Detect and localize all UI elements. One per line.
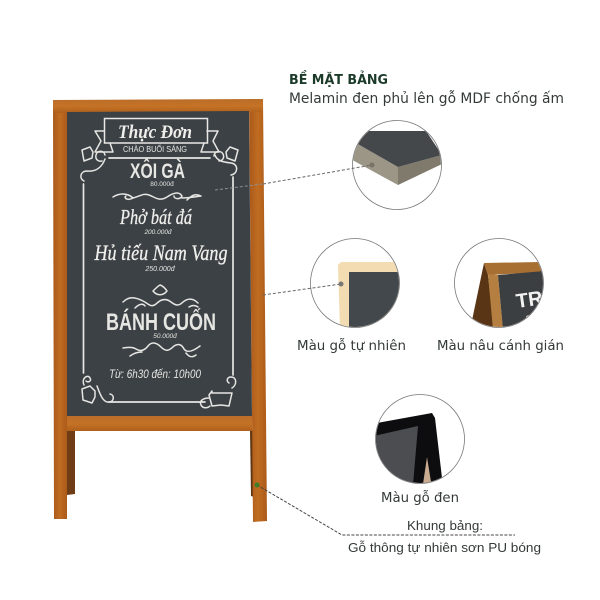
right edge of MDF xyxy=(398,155,442,185)
label: frame heading: Khung bảng: xyxy=(407,518,483,533)
board surface xyxy=(67,111,252,416)
menu item: Hủ tiếu Nam Vang: 250.000đ xyxy=(144,266,176,273)
heading: board surface: BỀ MẶT BẢNG xyxy=(289,69,388,88)
a-frame chalkboard xyxy=(53,99,267,522)
flourish 1 xyxy=(113,193,201,200)
flourish 2 xyxy=(123,285,198,308)
description: board surface: Melamin đen phủ lên gỗ MDF chống ấm xyxy=(289,90,564,107)
menu item: Phở bát đá: Phở bát đá xyxy=(119,205,192,229)
leader dot: wood colours xyxy=(338,282,344,286)
callout: cockroach brown circle xyxy=(454,238,545,330)
menu border ornaments xyxy=(81,147,238,408)
menu item: Xôi Gà xyxy=(130,159,185,188)
opening hours: Từ: 6h30 đến: 10h00 xyxy=(109,369,202,381)
leader line: surface xyxy=(215,165,372,190)
menu item: Hủ tiếu Nam Vang xyxy=(94,240,228,273)
leader dot: frame xyxy=(254,482,260,488)
menu banner xyxy=(95,118,219,154)
callout: black wood circle xyxy=(372,394,464,490)
label: black wood: Màu gỗ đen xyxy=(381,489,459,506)
leader dot: surface xyxy=(370,162,374,168)
callout: cockroach brown circle: TR xyxy=(515,287,545,313)
flourish 3 xyxy=(123,343,200,357)
callout: natural wood circle xyxy=(310,238,401,332)
left edge of MDF xyxy=(353,144,398,185)
title: Thực Đơn: Thực Đơn xyxy=(118,122,192,143)
menu item: Bánh Cuốn: 50.000đ xyxy=(153,333,178,340)
label: cockroach brown: Màu nâu cánh gián xyxy=(437,338,564,354)
melamin top xyxy=(356,131,442,167)
subtitle: CHÀO BUỔI SÁNG xyxy=(123,143,187,154)
label: natural wood: Màu gỗ tự nhiên xyxy=(297,337,406,354)
menu item: Bánh Cuốn xyxy=(106,308,216,340)
callout: surface detail circle xyxy=(345,120,442,210)
leader line: wood colours xyxy=(263,284,341,295)
menu item: Hủ tiếu Nam Vang: Hủ tiếu Nam Vang xyxy=(94,240,228,265)
label: frame description: Gỗ thông tự nhiên sơn PU bóng xyxy=(348,540,541,555)
menu item: Bánh Cuốn: BÁNH CUỐN xyxy=(106,308,216,336)
back legs xyxy=(67,430,254,497)
menu item: Phở bát đá: 200.000đ xyxy=(143,229,173,236)
leader line: frame xyxy=(257,485,515,535)
menu item: Xôi Gà: 80.000đ xyxy=(150,181,174,188)
menu item: Xôi Gà: XÔI GÀ xyxy=(130,159,185,183)
wooden frame xyxy=(53,99,267,522)
menu item: Phở bát đá xyxy=(119,205,192,236)
